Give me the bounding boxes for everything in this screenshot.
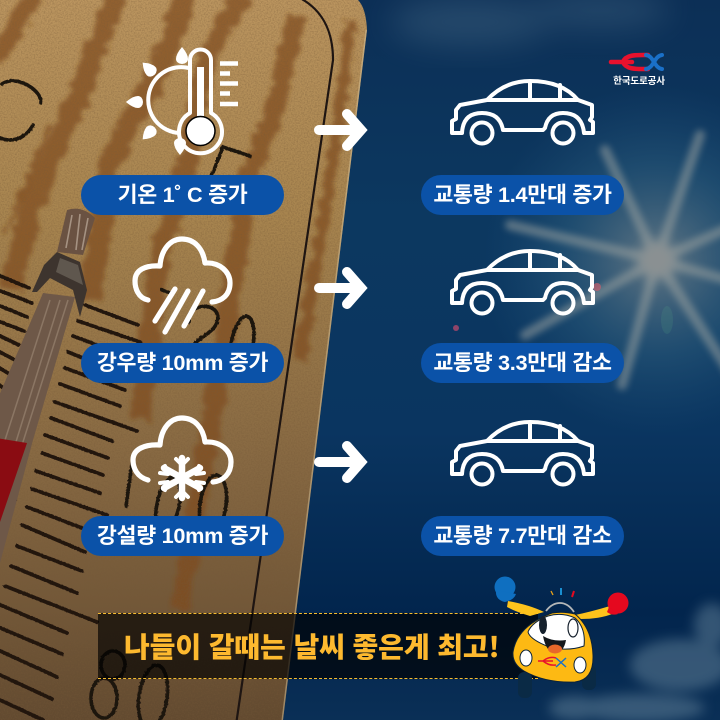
arrow 2 xyxy=(319,272,361,304)
pill: temperature xyxy=(81,175,284,215)
numerals xyxy=(0,81,258,720)
arrow 1 xyxy=(319,114,361,146)
pill: snowfall xyxy=(81,516,284,556)
pill: rainfall xyxy=(81,343,284,383)
pill: rainfall: 강우량 10mm 증가 xyxy=(97,350,268,375)
scale ticks xyxy=(0,275,140,720)
wood panel xyxy=(0,0,380,720)
logo text: 한국도로공사 xyxy=(613,73,665,87)
logo mark xyxy=(608,52,664,72)
glass tube xyxy=(0,209,95,563)
car 2 xyxy=(452,251,593,314)
pill: temperature: 기온 1˚ C 증가 xyxy=(118,182,247,207)
pill: traffic 2: 교통량 3.3만대 감소 xyxy=(433,350,612,375)
pill: traffic 2 xyxy=(421,343,624,383)
pill: traffic 1 xyxy=(421,175,624,215)
pill: traffic 3: 교통량 7.7만대 감소 xyxy=(433,523,612,548)
banner xyxy=(98,613,538,679)
arrow 3 xyxy=(319,446,361,478)
icon: snow cloud xyxy=(133,418,231,498)
scale line xyxy=(236,0,333,720)
pill: traffic 3 xyxy=(421,516,624,556)
pill: traffic 1: 교통량 1.4만대 증가 xyxy=(433,182,612,207)
icon: rain cloud xyxy=(135,239,230,332)
icon: sun and thermometer xyxy=(126,47,238,156)
banner: 나들이 갈때는 날씨 좋은게 최고! xyxy=(124,626,500,666)
mascot xyxy=(494,576,628,698)
car 3 xyxy=(452,422,593,484)
pill: snowfall: 강설량 10mm 증가 xyxy=(97,523,268,548)
clouds xyxy=(390,0,720,720)
wood stripes xyxy=(0,0,350,610)
right edge light xyxy=(283,30,367,720)
car 1 xyxy=(452,81,593,144)
sun glow and rays xyxy=(453,85,720,435)
